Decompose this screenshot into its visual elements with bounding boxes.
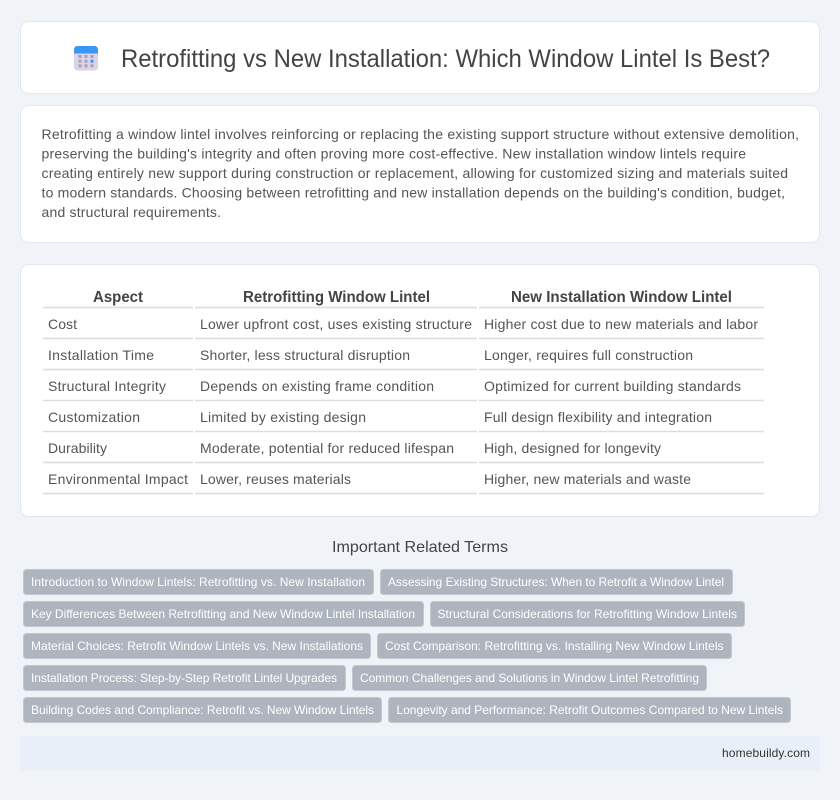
table row: durability: Moderate, potential for reduced lifespan xyxy=(200,440,454,456)
table row: durability: Durability xyxy=(48,440,107,456)
text block: introduction paragraph: Retrofitting a window lintel involves reinforcing or replacing the existing support structure without extensive demolition, xyxy=(42,126,799,142)
title: Retrofitting vs New Installation: Which Window Lintel Is Best? xyxy=(121,45,770,73)
table row: customization: Full design flexibility and integration xyxy=(484,409,712,425)
table header row: Retrofitting Window Lintel xyxy=(243,289,430,306)
chip: structural considerations: Structural Considerations for Retrofitting Window Lintels xyxy=(438,607,737,621)
table row: cost: Cost xyxy=(48,316,77,332)
chip: building codes xyxy=(24,698,382,722)
chip: structural considerations xyxy=(430,602,744,626)
chip: material choices: Material Choices: Retrofit Window Lintels vs. New Installations xyxy=(31,639,363,653)
table row: durability xyxy=(43,440,764,462)
chip: installation process xyxy=(24,666,346,690)
chip: key differences: Key Differences Between Retrofitting and New Window Lintel Installation xyxy=(31,607,415,621)
chip: installation process: Installation Process: Step-by-Step Retrofit Lintel Upgrades xyxy=(31,671,337,685)
table row: structural integrity: Optimized for current building standards xyxy=(484,378,741,394)
chip: key differences xyxy=(24,602,424,626)
table row: environmental impact: Environmental Impact xyxy=(48,471,188,487)
chip: introduction: Introduction to Window Lintels: Retrofitting vs. New Installation xyxy=(31,575,365,589)
chip: cost comparison xyxy=(378,634,732,658)
table row: customization xyxy=(43,409,764,432)
footer source text: homebuildy.com xyxy=(722,746,810,760)
table header row xyxy=(43,289,764,308)
footer xyxy=(20,736,820,770)
panel: header xyxy=(20,22,820,94)
table row: installation time xyxy=(43,347,764,370)
chip: longevity and performance xyxy=(388,698,790,722)
table row: structural integrity: Depends on existing frame condition xyxy=(200,378,434,394)
table row: durability: High, designed for longevity xyxy=(484,440,661,456)
table row: environmental impact xyxy=(43,471,764,494)
chip: introduction xyxy=(24,570,374,594)
chip: assessing structures xyxy=(380,570,732,594)
text block: introduction paragraph xyxy=(42,126,799,220)
chip: common challenges xyxy=(352,666,706,690)
chip: building codes: Building Codes and Compliance: Retrofit vs. New Window Lintels xyxy=(31,703,374,717)
text block: introduction paragraph: creating entirely new support during construction or replacement, allowing for customized sizing and materials suited xyxy=(42,165,788,181)
table row: installation time: Shorter, less structural disruption xyxy=(200,347,410,363)
panel: comparison table xyxy=(20,264,820,516)
table row: customization: Customization xyxy=(48,409,140,425)
table row: customization: Limited by existing design xyxy=(200,409,366,425)
chip: material choices xyxy=(24,634,370,658)
text block: introduction paragraph: preserving the building's integrity and often proving more cost-effective. New installation window lintels require xyxy=(42,146,746,162)
chip: common challenges: Common Challenges and Solutions in Window Lintel Retrofitting xyxy=(360,671,699,685)
table row: installation time: Longer, requires full construction xyxy=(484,347,693,363)
text block: introduction paragraph: and structural requirements. xyxy=(42,204,221,220)
table row: structural integrity xyxy=(43,378,764,400)
text block: introduction paragraph: to modern standards. Choosing between retrofitting and new installation depends on the building's condition, budget, xyxy=(42,184,785,200)
chip: longevity and performance: Longevity and Performance: Retrofit Outcomes Compared to New Lintels xyxy=(396,703,783,717)
table row: environmental impact: Higher, new materials and waste xyxy=(484,471,691,487)
table row: cost: Higher cost due to new materials and labor xyxy=(484,316,758,332)
chip: assessing structures: Assessing Existing Structures: When to Retrofit a Window Lintel xyxy=(388,575,724,589)
table row: structural integrity: Structural Integrity xyxy=(48,378,166,394)
heading: important related terms: Important Related Terms xyxy=(332,539,508,556)
table row: cost xyxy=(43,316,764,338)
table row: installation time: Installation Time xyxy=(48,347,154,363)
table row: cost: Lower upfront cost, uses existing structure xyxy=(200,316,472,332)
panel: introduction xyxy=(20,106,820,242)
icon: window calendar grid xyxy=(74,46,98,70)
chip: cost comparison: Cost Comparison: Retrofitting vs. Installing New Window Lintels xyxy=(385,639,724,653)
table header row: Aspect xyxy=(93,289,144,306)
table header row: New Installation Window Lintel xyxy=(511,289,732,306)
panel: related term chips xyxy=(24,570,790,722)
table row: environmental impact: Lower, reuses materials xyxy=(200,471,351,487)
